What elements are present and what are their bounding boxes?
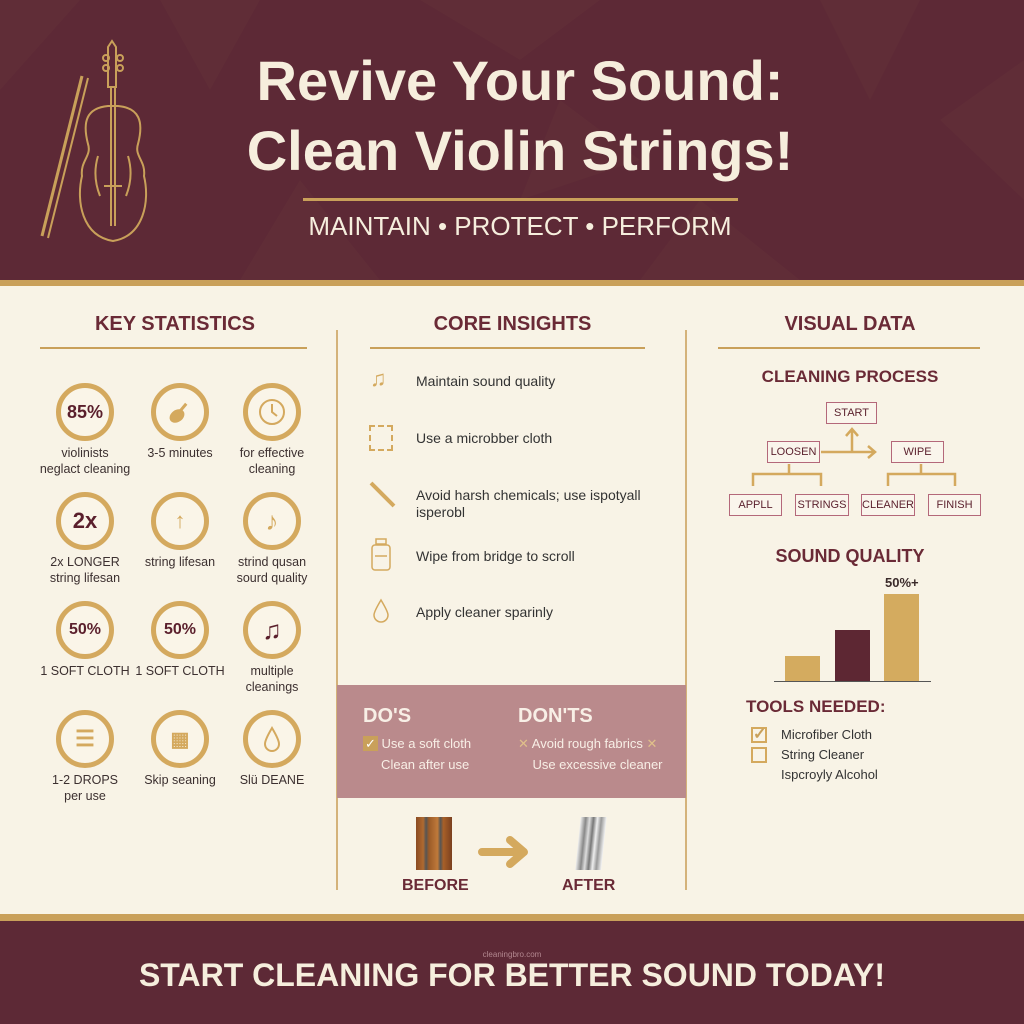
flowchart: WIPE	[903, 446, 932, 458]
stat 50%: 50%	[69, 621, 101, 638]
stat note	[237, 492, 308, 585]
tools checklist: Ispcroyly Alcohol	[781, 767, 878, 782]
stat clock: for effective	[240, 446, 304, 460]
title: Clean Violin Strings!	[247, 119, 793, 182]
heading: cleaning process: CLEANING PROCESS	[762, 367, 938, 386]
insight text 4: Wipe from bridge to scroll	[416, 548, 575, 564]
stat 3-5 minutes	[147, 383, 213, 460]
tools checklist	[751, 726, 878, 782]
stat 50% b	[135, 601, 225, 678]
before image	[416, 817, 452, 870]
insight icon: drop	[373, 598, 389, 623]
insight text 3: isperobl	[416, 504, 465, 520]
donts list	[518, 736, 663, 772]
insight text 2: Use a microbber cloth	[416, 430, 552, 446]
title: Revive Your Sound:	[257, 49, 783, 112]
stat skip: ▦	[171, 728, 189, 750]
stat music: multiple	[250, 664, 294, 678]
stat skip	[144, 710, 216, 787]
title rule	[303, 198, 738, 201]
stat drops: 1-2 DROPS	[52, 773, 118, 787]
panel: visual data	[718, 313, 980, 386]
stat clock	[240, 383, 304, 476]
insight icon: stick	[370, 482, 396, 508]
stat 50% b: 50%	[164, 621, 196, 638]
stat 50%: 1 SOFT CLOTH	[40, 664, 130, 678]
insight text 3	[416, 487, 641, 520]
subtitle: MAINTAIN • PROTECT • PERFORM	[308, 211, 732, 241]
stat note: sourd quality	[237, 571, 307, 585]
stat drop	[240, 710, 304, 787]
flowchart: START	[834, 407, 869, 419]
stat 85%: violinists	[61, 446, 109, 460]
flowchart: LOOSEN	[771, 446, 816, 458]
insight icon: bottle	[371, 538, 391, 571]
footer call to action: START CLEANING FOR BETTER SOUND TODAY!	[139, 957, 885, 993]
heading: key statistics: KEY STATISTICS	[95, 313, 255, 335]
stat skip: Skip seaning	[144, 773, 216, 787]
tools checklist: String Cleaner	[781, 747, 864, 762]
dos list: ✓ Use a soft cloth	[365, 736, 471, 751]
stat 2x	[50, 492, 120, 585]
dos list: Clean after use	[381, 757, 469, 772]
stat 2x: 2x LONGER	[50, 555, 120, 569]
panel: dos and donts	[337, 685, 686, 798]
stat 3-5 minutes: 3-5 minutes	[147, 446, 213, 460]
insight text 1: Maintain sound quality	[416, 373, 555, 389]
stat music	[243, 601, 301, 694]
heading: core insights: CORE INSIGHTS	[434, 313, 591, 335]
stat arrow: string lifesan	[145, 555, 215, 569]
footer url: cleaningbro.com	[483, 950, 541, 959]
stat music: cleanings	[246, 680, 298, 694]
insight text 3: Avoid harsh chemicals; use ispotyall	[416, 487, 641, 503]
icon: violin and bow	[40, 39, 148, 242]
insight text 5: Apply cleaner sparinly	[416, 604, 553, 620]
title	[247, 49, 793, 182]
stat drop: Slü DEANE	[240, 773, 304, 787]
tools checklist: Microfiber Cloth	[781, 727, 872, 742]
stat 2x: 2x	[73, 508, 97, 533]
flowchart	[729, 402, 981, 516]
insight icon: note: ♫	[370, 366, 386, 391]
stat clock: cleaning	[249, 462, 295, 476]
bar chart	[774, 575, 931, 682]
heading: tools needed: TOOLS NEEDED:	[746, 697, 885, 716]
panel: key statistics	[40, 313, 308, 803]
heading: dos: DO'S	[363, 705, 411, 727]
stat drops: ☰	[75, 726, 95, 751]
stat 85%: neglact cleaning	[40, 462, 130, 476]
header band	[0, 0, 1024, 280]
stat arrow: ↑	[174, 508, 186, 533]
dos list	[363, 736, 471, 772]
flowchart: STRINGS	[798, 499, 846, 511]
donts list: Use excessive cleaner	[532, 757, 663, 772]
flowchart: APPLL	[738, 499, 773, 511]
stat 2x: string lifesan	[50, 571, 120, 585]
stat arrow	[145, 492, 215, 569]
flowchart: FINISH	[936, 499, 973, 511]
stat 50% b: 1 SOFT CLOTH	[135, 664, 225, 678]
footer band	[0, 914, 1024, 1024]
heading: visual data: VISUAL DATA	[784, 313, 916, 335]
stat drops: per use	[64, 789, 106, 803]
tools checklist: ✓	[753, 726, 766, 743]
stat note: ♪	[266, 506, 278, 536]
label before: BEFORE	[402, 877, 469, 894]
heading: sound quality: SOUND QUALITY	[775, 546, 924, 566]
label after: AFTER	[562, 877, 615, 894]
donts list: ✕ Avoid rough fabrics ✕	[518, 736, 657, 751]
stat 85%: 85%	[67, 402, 103, 422]
flowchart: CLEANER	[862, 499, 914, 511]
stat 50%	[40, 601, 130, 678]
stat note: strind qusan	[238, 555, 306, 569]
stat drops	[52, 710, 118, 803]
insight icon: cloth	[369, 425, 393, 451]
arrow: before to after	[478, 836, 528, 868]
after image	[575, 817, 607, 870]
stat music: ♫	[262, 614, 282, 644]
bar chart: 50%+	[885, 575, 919, 590]
stat 85%	[40, 383, 130, 476]
heading: donts: DON'TS	[518, 705, 593, 727]
